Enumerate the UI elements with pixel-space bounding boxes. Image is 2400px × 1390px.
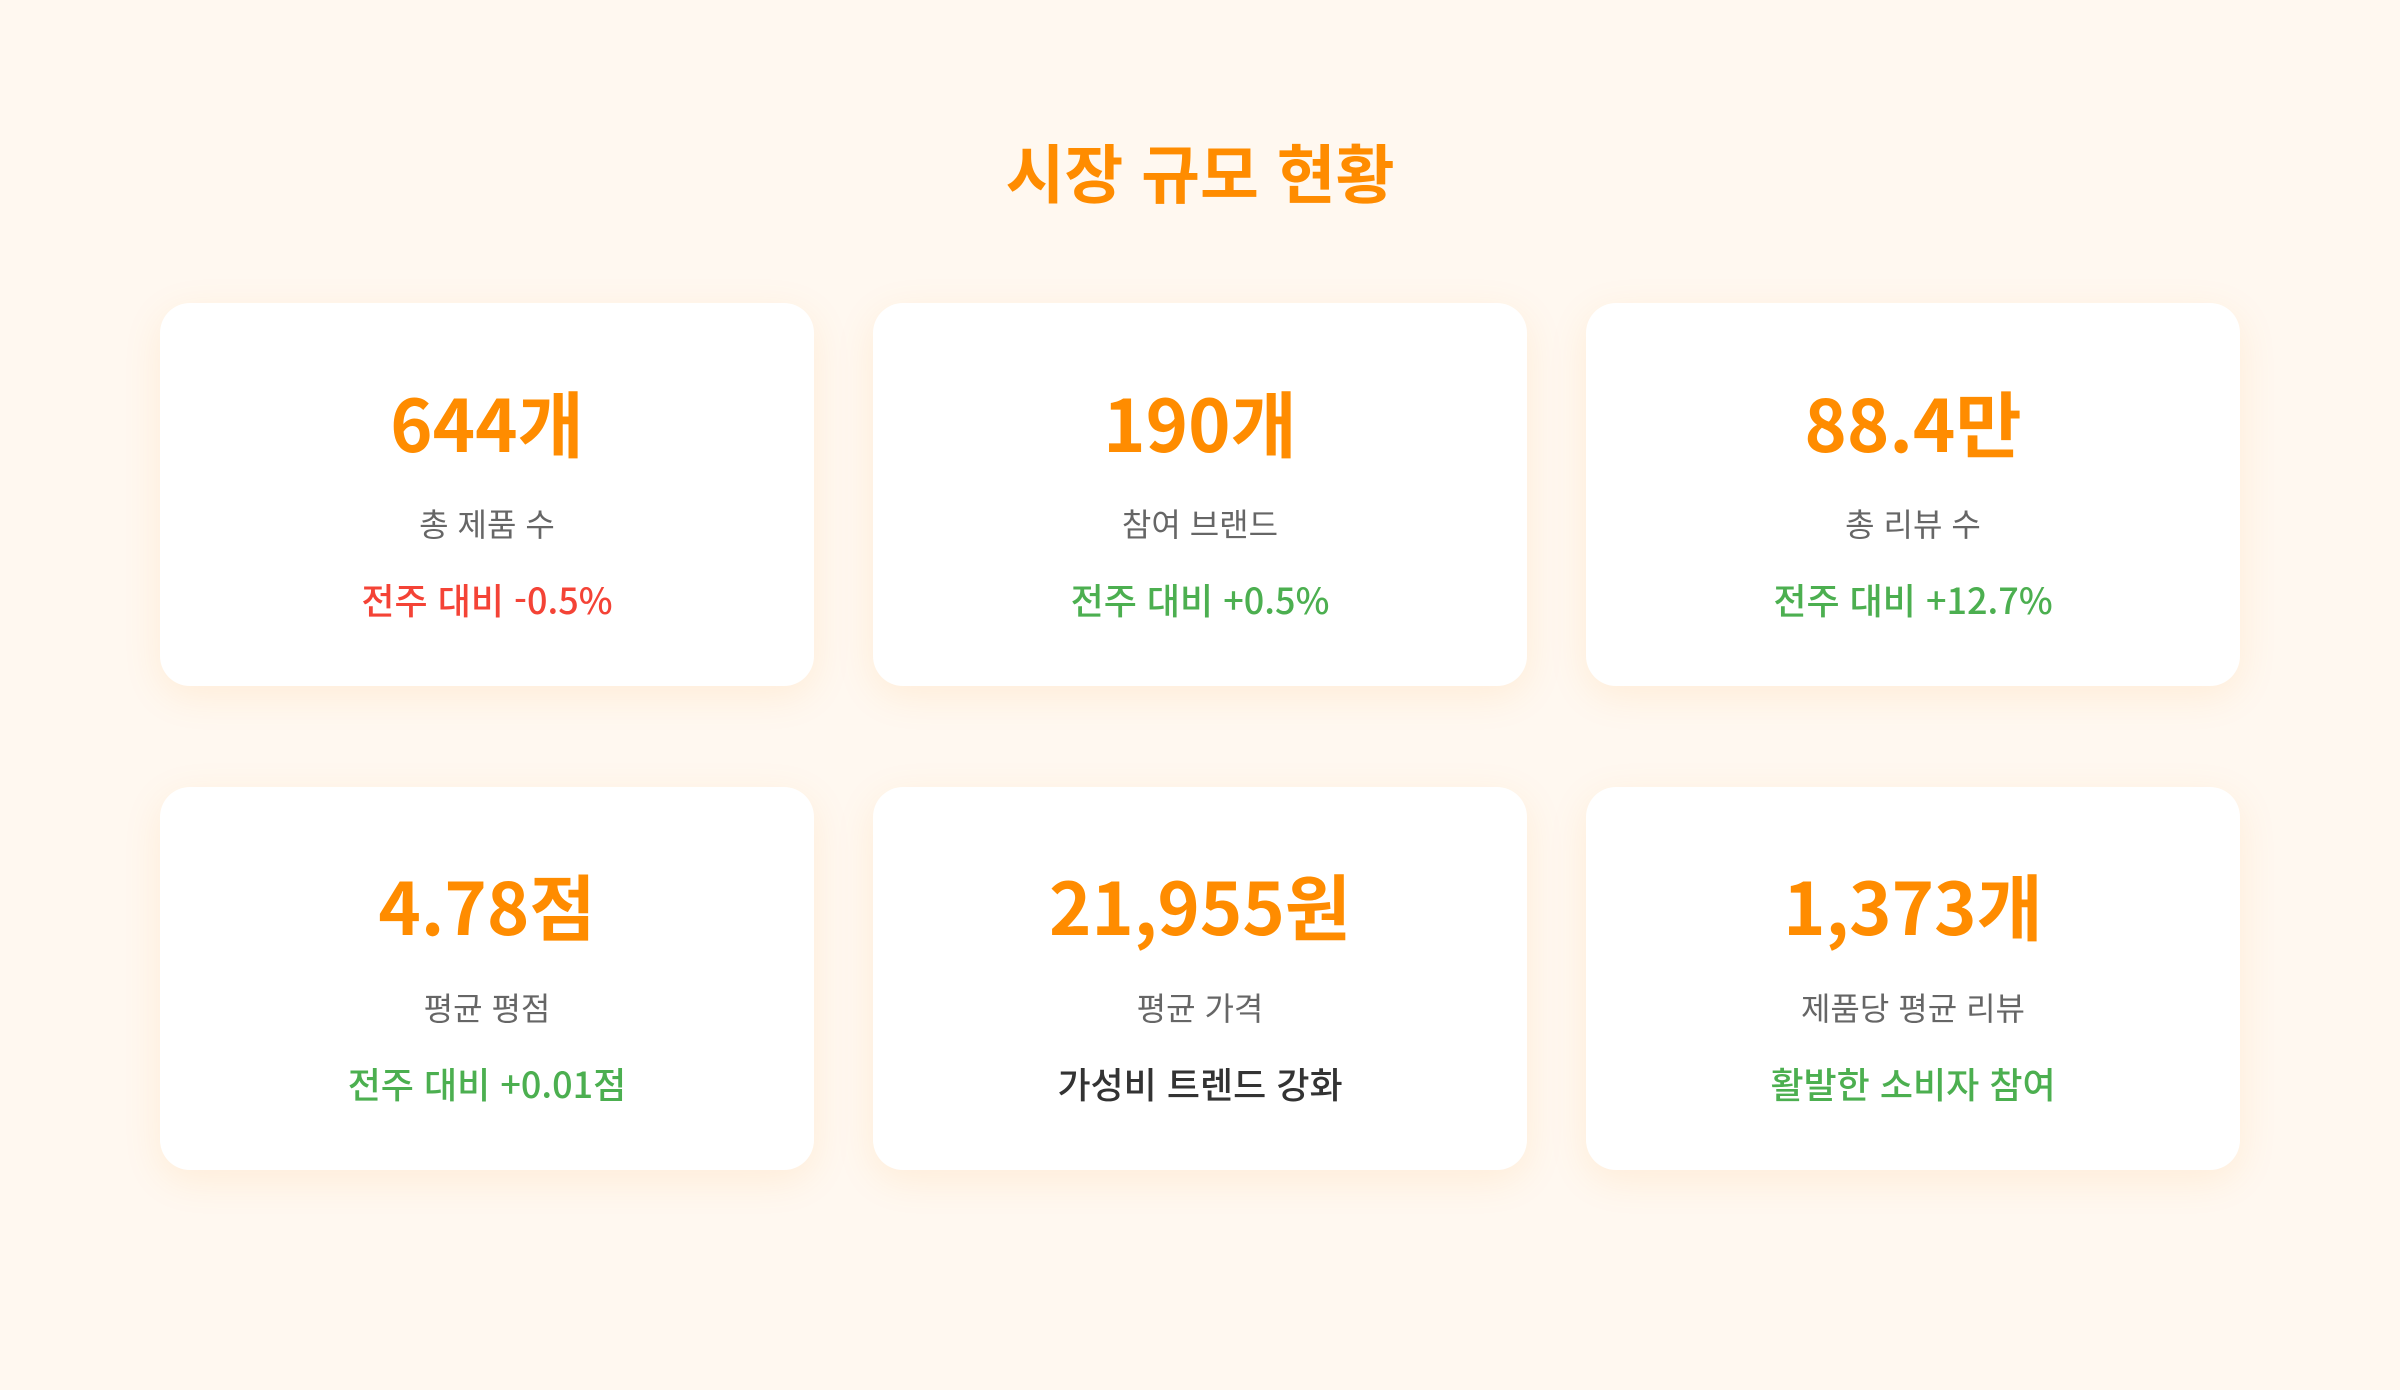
label: reviews per product: 제품당 평균 리뷰 xyxy=(1801,984,2025,1030)
change: rating: 전주 대비 +0.01점 xyxy=(348,1057,626,1109)
value: price: 21,955원 xyxy=(1049,851,1351,956)
label: reviews: 총 리뷰 수 xyxy=(1845,500,1981,546)
panel: total products xyxy=(160,303,814,686)
value: brands: 190개 xyxy=(1103,368,1297,473)
label: brands: 참여 브랜드 xyxy=(1122,500,1278,546)
panel: total reviews xyxy=(1586,303,2240,686)
value: reviews: 88.4만 xyxy=(1804,368,2022,473)
value: reviews per product: 1,373개 xyxy=(1783,851,2043,956)
label: price: 평균 가격 xyxy=(1137,984,1263,1030)
value: rating: 4.78점 xyxy=(378,851,596,956)
panel: average price xyxy=(873,787,1527,1170)
panel: reviews per product xyxy=(1586,787,2240,1170)
change: total products: 전주 대비 -0.5% xyxy=(361,573,613,625)
change: reviews: 전주 대비 +12.7% xyxy=(1773,573,2053,625)
panel: average rating xyxy=(160,787,814,1170)
label: rating: 평균 평점 xyxy=(424,984,550,1030)
label: total products: 총 제품 수 xyxy=(419,500,555,546)
panel: participating brands xyxy=(873,303,1527,686)
value: total products: 644개 xyxy=(390,368,584,473)
change: brands: 전주 대비 +0.5% xyxy=(1071,573,1329,625)
title: 시장 규모 현황 xyxy=(1005,125,1395,217)
note: price: 가성비 트렌드 강화 xyxy=(1057,1057,1343,1109)
note: reviews per product: 활발한 소비자 참여 xyxy=(1770,1057,2056,1109)
